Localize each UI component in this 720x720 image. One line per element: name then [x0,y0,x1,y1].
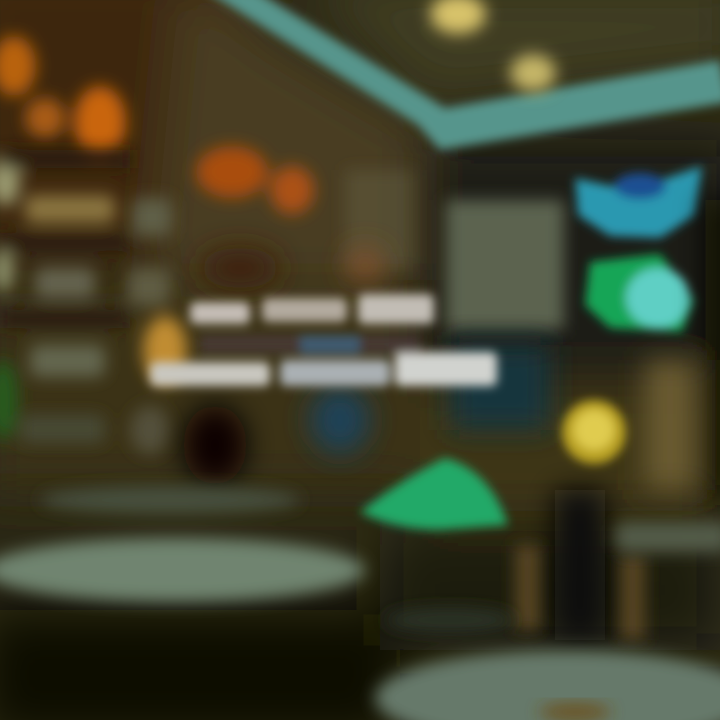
ceiling lights [430,0,556,92]
left shelves with warm lights [0,36,314,454]
blue and green screens [575,166,702,332]
yellow globe lamp [562,400,626,464]
ceiling beam [205,0,720,150]
wall panel [345,170,564,330]
blurred headline text [150,294,497,386]
round table tops [0,486,720,720]
table legs [515,545,645,640]
dark figure in centre [183,248,550,485]
right side vertical elements [555,200,720,640]
green mound lamp [360,458,508,530]
